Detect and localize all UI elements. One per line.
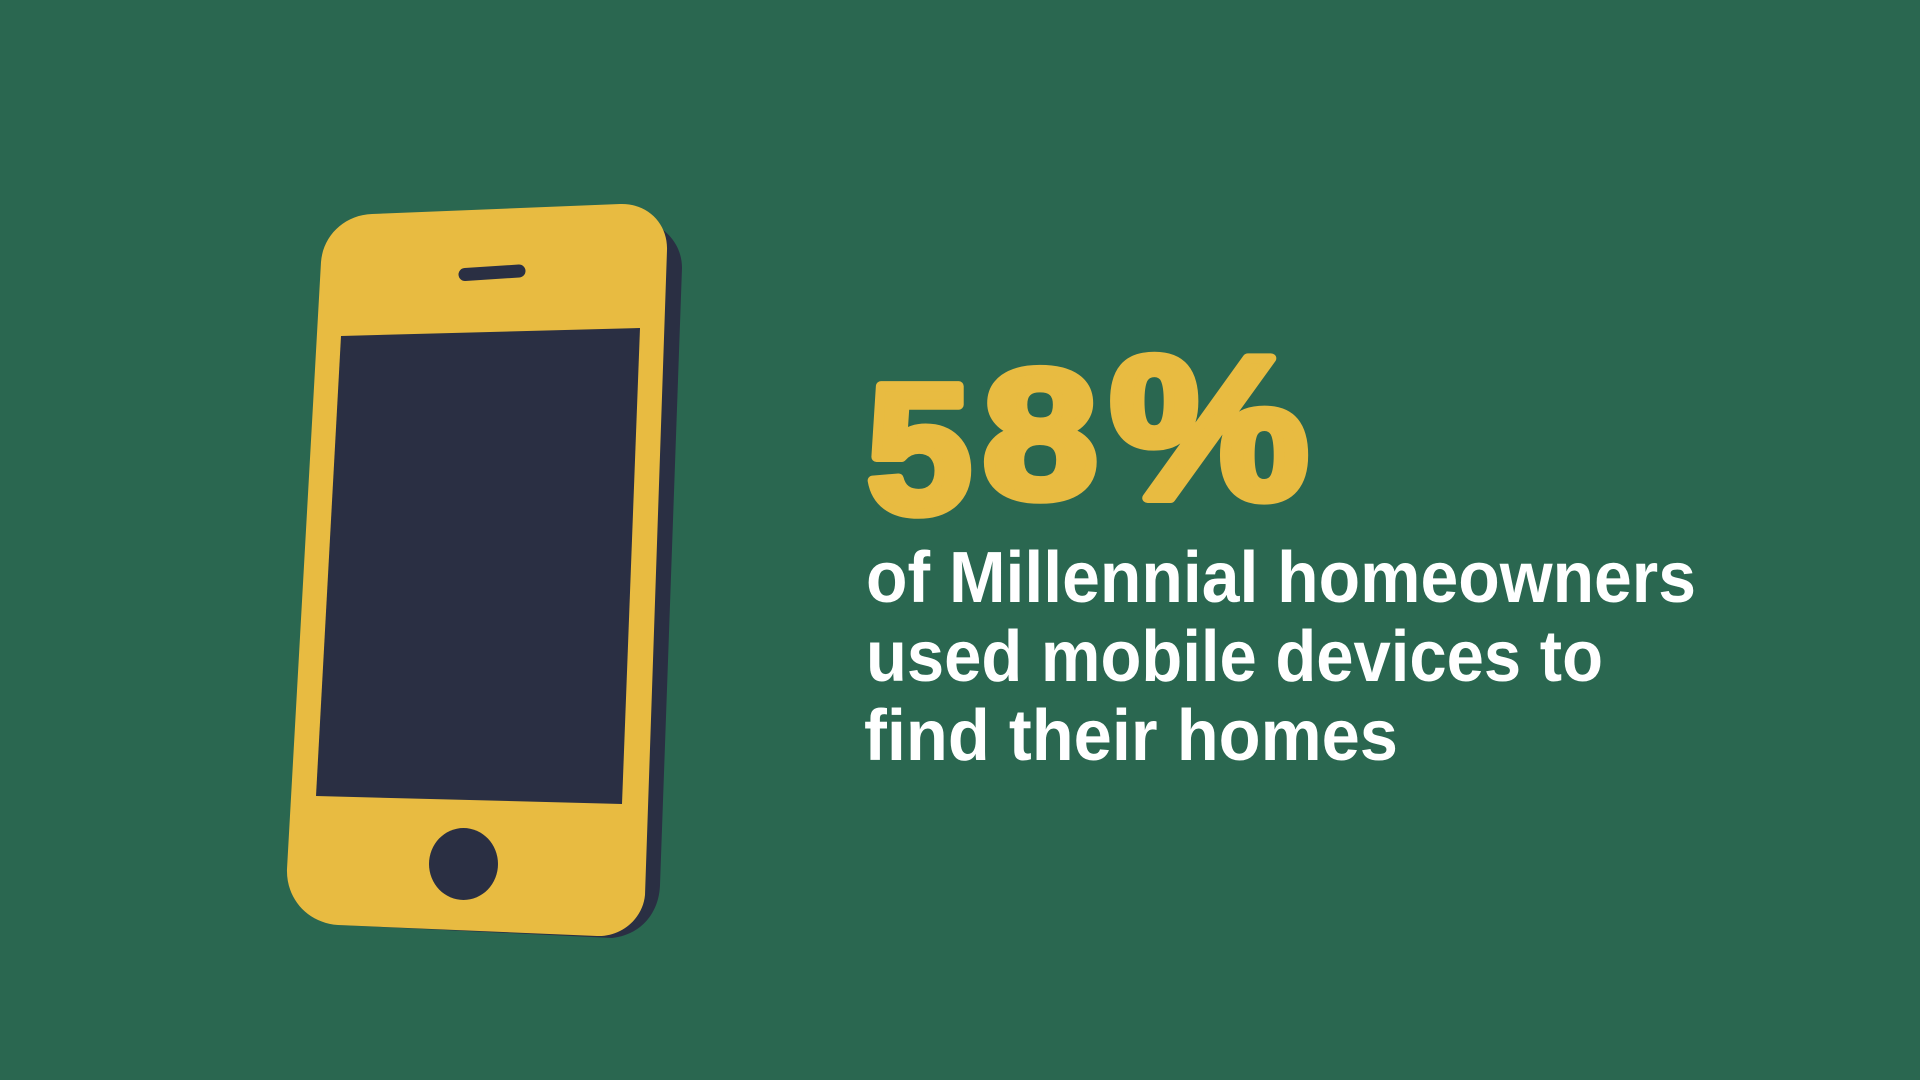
phone home button xyxy=(429,828,498,900)
phone speaker xyxy=(465,271,519,274)
digit 5: 5 xyxy=(867,347,971,552)
statistic: 58% xyxy=(867,315,1309,552)
line 3: find their homes xyxy=(864,696,1398,776)
phone shadow xyxy=(340,222,682,938)
description text xyxy=(864,538,1696,776)
line 2: used mobile devices to xyxy=(866,617,1603,697)
line 1: of Millennial homeowners xyxy=(866,538,1696,618)
phone body xyxy=(287,204,667,936)
percent sign: % xyxy=(1110,315,1309,542)
digit 8: 8 xyxy=(983,333,1097,536)
icon: smartphone xyxy=(287,204,682,938)
phone screen xyxy=(316,328,640,804)
